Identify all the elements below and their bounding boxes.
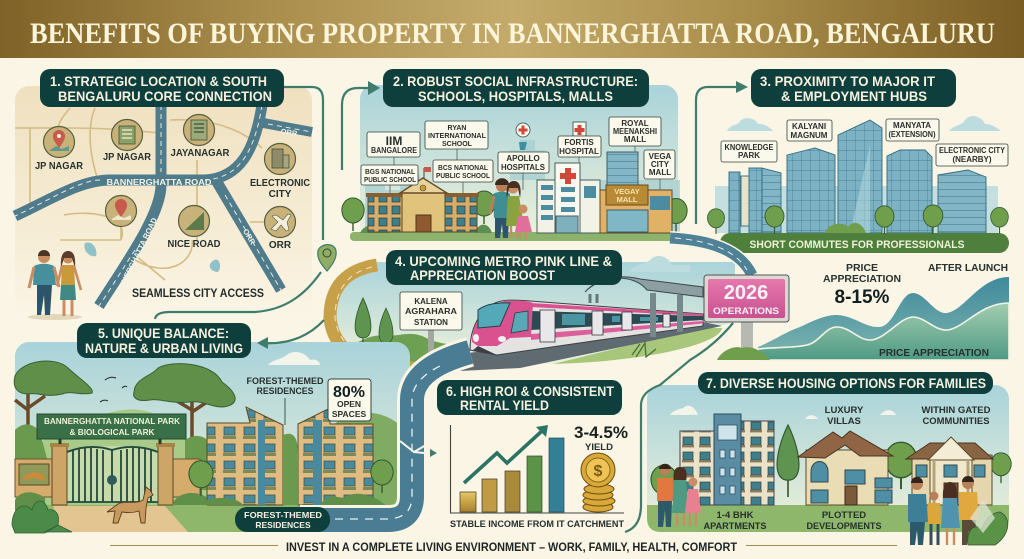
park sign: & BIOLOGICAL PARK	[70, 427, 155, 437]
housing labels	[704, 405, 991, 532]
panel: 1 strategic location map	[15, 69, 312, 320]
label: Vega City Mall: VEGA	[649, 152, 672, 161]
label: BGS National Public School: BGS NATIONAL	[365, 169, 416, 176]
heading: APPRECIATION BOOST	[410, 267, 555, 283]
trees	[355, 298, 393, 354]
label: IIM Bangalore: IIM	[386, 134, 402, 148]
callout: 80% open spaces: 80%	[333, 384, 365, 401]
heading: 7. DIVERSE HOUSING OPTIONS FOR FAMILIES	[706, 375, 986, 391]
trees	[14, 361, 235, 490]
label: Manyata Extension: MANYATA	[893, 121, 931, 130]
label: Fortis Hospital: FORTIS	[564, 138, 594, 147]
label: Vega City Mall: CITY	[651, 160, 670, 169]
pill: forest-themed residences: RESIDENCES	[255, 520, 311, 530]
residences label	[246, 376, 324, 425]
place labels: CITY	[269, 189, 292, 200]
canopy pillars	[653, 293, 680, 337]
villa	[798, 431, 893, 505]
road	[300, 352, 470, 520]
mall building: VEGAY	[614, 187, 640, 196]
label: Electronic City: ELECTRONIC CITY	[939, 146, 1006, 155]
panel: 7 diverse housing	[647, 372, 1011, 545]
label: Kalyani Magnum: KALYANI	[792, 122, 826, 131]
signposts	[390, 146, 660, 193]
label: IIM Bangalore	[367, 132, 420, 157]
chart labels	[823, 262, 1008, 359]
apartment buildings	[172, 407, 393, 505]
teal wave	[758, 277, 1009, 360]
heading	[437, 380, 622, 415]
panel: 1 strategic location map: BANNERGHATTA ROAD	[112, 216, 159, 299]
map background	[15, 86, 312, 316]
label: Knowledge Park	[721, 141, 777, 162]
sky	[335, 262, 735, 364]
station sign: AGRAHARA	[405, 307, 457, 316]
hills	[345, 334, 475, 362]
callout: 80% open spaces	[328, 379, 371, 421]
chart labels: 8-15%	[835, 287, 890, 308]
icon: gold coin stack: $	[594, 463, 603, 480]
heading: NATURE & URBAN LIVING	[85, 340, 243, 356]
label: BGS National Public School: PUBLIC SCHOOL	[364, 177, 417, 184]
housing labels: DEVELOPMENTS	[806, 521, 882, 532]
callout: 80% open spaces: OPEN	[337, 399, 361, 409]
heading: 1. STRATEGIC LOCATION & SOUTH	[50, 73, 267, 89]
station sign: STATION	[414, 318, 448, 327]
green band	[720, 233, 1009, 253]
label: Apollo Hospitals: APOLLO	[506, 154, 540, 163]
heading	[698, 372, 993, 394]
chart labels: PRICE	[846, 262, 878, 274]
park sign: BANNERGHATTA NATIONAL PARK	[44, 416, 181, 426]
grass tuft	[632, 343, 656, 357]
label: BCS National Public School: PUBLIC SCHOOL	[436, 173, 491, 180]
place labels: ELECTRONIC	[250, 178, 310, 189]
heading	[77, 323, 251, 358]
heading: 2. ROBUST SOCIAL INFRASTRUCTURE:	[393, 73, 638, 89]
tagline: INVEST IN A COMPLETE LIVING ENVIRONMENT – WORK, FAMILY, HEALTH, COMFORT	[286, 542, 737, 554]
icon: green map pin	[318, 245, 336, 271]
housing labels: 1-4 BHK	[717, 510, 754, 521]
dog	[107, 487, 153, 523]
place labels: JP NAGAR	[103, 152, 152, 163]
label: Fortis Hospital	[558, 136, 601, 157]
label: Royal Meenakshi Mall: MALL	[624, 135, 646, 144]
housing labels: VILLAS	[827, 416, 861, 427]
roads	[15, 105, 312, 306]
track	[415, 322, 722, 372]
chart labels: AFTER LAUNCH	[928, 262, 1008, 274]
residences label: RESIDENCES	[256, 386, 314, 396]
station sign: KALENA	[414, 297, 448, 306]
trees	[342, 191, 687, 233]
label: BCS National Public School: BCS NATIONAL	[438, 165, 489, 172]
yield callout: 3-4.5%	[574, 423, 628, 442]
trees	[651, 425, 1011, 504]
heading: SCHOOLS, HOSPITALS, MALLS	[418, 88, 613, 104]
place labels: JP NAGAR	[35, 161, 84, 172]
label: Royal Meenakshi Mall: MEENAKSHI	[613, 127, 657, 136]
clouds	[727, 116, 1001, 131]
heading: BENGALURU CORE CONNECTION	[58, 88, 272, 104]
sky	[647, 385, 1009, 532]
blue road with pill label	[235, 352, 470, 532]
panel: 1 strategic location map: ORR	[280, 127, 298, 138]
label: Knowledge Park: KNOWLEDGE	[724, 143, 774, 152]
road labels: BANNERGHATTA ROAD	[106, 177, 212, 187]
couple illustration	[28, 250, 82, 320]
sky	[360, 85, 678, 240]
panel: 5 nature and urban living	[12, 323, 410, 533]
price appreciation chart	[758, 262, 1009, 360]
station sign	[400, 292, 462, 356]
chart labels: APPRECIATION	[823, 273, 901, 285]
ground	[647, 505, 1009, 532]
caption: SEAMLESS CITY ACCESS	[132, 288, 264, 300]
clouds	[670, 406, 896, 419]
callout: 80% open spaces: SPACES	[332, 409, 366, 419]
label: Manyata Extension	[886, 119, 939, 141]
housing labels: COMMUNITIES	[922, 416, 990, 427]
housing labels: LUXURY	[825, 405, 864, 416]
bushes	[15, 492, 243, 510]
gold road	[330, 265, 415, 368]
park sign	[37, 414, 186, 444]
sign: 2026 operations	[704, 275, 789, 360]
heading: 4. UPCOMING METRO PINK LINE &	[395, 253, 612, 269]
label: Ryan International School	[425, 121, 488, 149]
caption: SHORT COMMUTES FOR PROFESSIONALS	[750, 239, 964, 251]
label: Ryan International School: RYAN	[448, 125, 466, 132]
pill: forest-themed residences: FOREST-THEMED	[244, 510, 322, 520]
apartments	[680, 414, 774, 505]
branch arrow	[400, 441, 434, 453]
housing labels: WITHIN GATED	[922, 405, 991, 416]
icons: location circles	[44, 114, 296, 238]
sign: 2026 operations: OPERATIONS	[713, 306, 779, 317]
birds	[100, 377, 127, 402]
label: Manyata Extension: (EXTENSION)	[888, 130, 936, 139]
panel: 2 social infrastructure	[342, 69, 687, 241]
canopy	[585, 277, 703, 303]
label: Vega City Mall: MALL	[649, 168, 671, 177]
label: BCS National Public School	[433, 160, 493, 182]
heading	[40, 69, 284, 107]
heading	[751, 69, 956, 107]
heading: 6. HIGH ROI & CONSISTENT	[446, 383, 614, 399]
place labels	[35, 148, 310, 251]
panel: 6 ROI and rental yield	[437, 380, 628, 530]
place labels: JAYANAGAR	[170, 148, 230, 159]
foreground leaves	[968, 512, 1008, 545]
family illustration	[490, 178, 532, 239]
label: Royal Meenakshi Mall	[609, 117, 661, 146]
cloud	[630, 256, 690, 272]
label: Apollo Hospitals: HOSPITALS	[501, 163, 546, 172]
pill: forest-themed residences	[235, 507, 330, 532]
icon: gold coin stack	[581, 453, 615, 512]
sky and ground	[15, 342, 410, 532]
label: Royal Meenakshi Mall: ROYAL	[621, 119, 649, 128]
diamond watermark	[970, 500, 995, 533]
caption: STABLE INCOME FROM IT CATCHMENT	[450, 519, 624, 530]
sign: 2026 operations: 2026	[724, 282, 768, 304]
mall building: MALL	[617, 195, 638, 204]
label: Electronic City	[936, 144, 1008, 166]
leaves foreground	[12, 501, 72, 533]
growth arrow	[464, 425, 548, 483]
label: Fortis Hospital: HOSPITAL	[559, 147, 599, 156]
family: left	[657, 464, 701, 527]
label: Vega City Mall	[644, 150, 675, 179]
housing labels: PLOTTED	[822, 510, 866, 521]
place labels: NICE ROAD	[168, 239, 220, 250]
park gate	[50, 443, 175, 505]
trees	[707, 205, 1008, 234]
label: Ryan International School: SCHOOL	[442, 141, 473, 148]
ground	[350, 232, 678, 241]
panel: 4 metro pink line	[330, 238, 789, 372]
label: BGS National Public School	[361, 165, 418, 185]
heading: & EMPLOYMENT HUBS	[781, 88, 927, 104]
housing labels: APARTMENTS	[704, 521, 766, 532]
label: Kalyani Magnum	[787, 120, 832, 141]
label: Ryan International School: INTERNATIONAL	[428, 133, 487, 140]
upper blue road	[670, 238, 752, 275]
heading: RENTAL YIELD	[460, 397, 549, 413]
panel: 3 IT and employment hubs	[707, 69, 1009, 253]
flow connectors	[155, 81, 748, 532]
school building	[366, 167, 479, 232]
icon: Fortis red cross	[573, 122, 586, 136]
family: right	[908, 476, 979, 545]
heading: 5. UNIQUE BALANCE:	[98, 325, 229, 341]
label: Apollo Hospitals	[498, 152, 549, 173]
yield callout	[574, 423, 628, 453]
icon: Apollo red cross	[516, 123, 530, 150]
cloud	[268, 352, 320, 365]
hospital building	[537, 163, 600, 233]
mall building	[600, 152, 672, 233]
glass towers	[729, 120, 986, 233]
ponds	[84, 242, 220, 272]
residences label: FOREST-THEMED	[246, 376, 324, 386]
minor streets	[15, 108, 290, 280]
label: Knowledge Park: PARK	[738, 151, 760, 160]
place labels: ORR	[269, 240, 292, 251]
background skyline	[365, 140, 680, 232]
green lawn	[553, 328, 722, 364]
heading	[386, 250, 622, 285]
heading	[383, 69, 649, 107]
gated community house	[906, 437, 993, 505]
label: Electronic City: (NEARBY)	[952, 155, 992, 164]
chart labels: PRICE APPRECIATION	[879, 347, 989, 359]
metro train	[470, 300, 703, 355]
green wave	[758, 303, 1009, 360]
panel: 1 strategic location map: ORR	[241, 227, 258, 247]
title banner	[0, 0, 1024, 58]
dirt path	[53, 506, 188, 532]
bar chart	[450, 425, 624, 513]
yield callout: YIELD	[585, 442, 613, 453]
heading: 3. PROXIMITY TO MAJOR IT	[760, 73, 935, 89]
label: Kalyani Magnum: MAGNUM	[791, 131, 828, 140]
label: IIM Bangalore: BANGALORE	[371, 146, 418, 155]
brick walls	[15, 459, 200, 497]
skyline backdrop	[715, 186, 998, 233]
